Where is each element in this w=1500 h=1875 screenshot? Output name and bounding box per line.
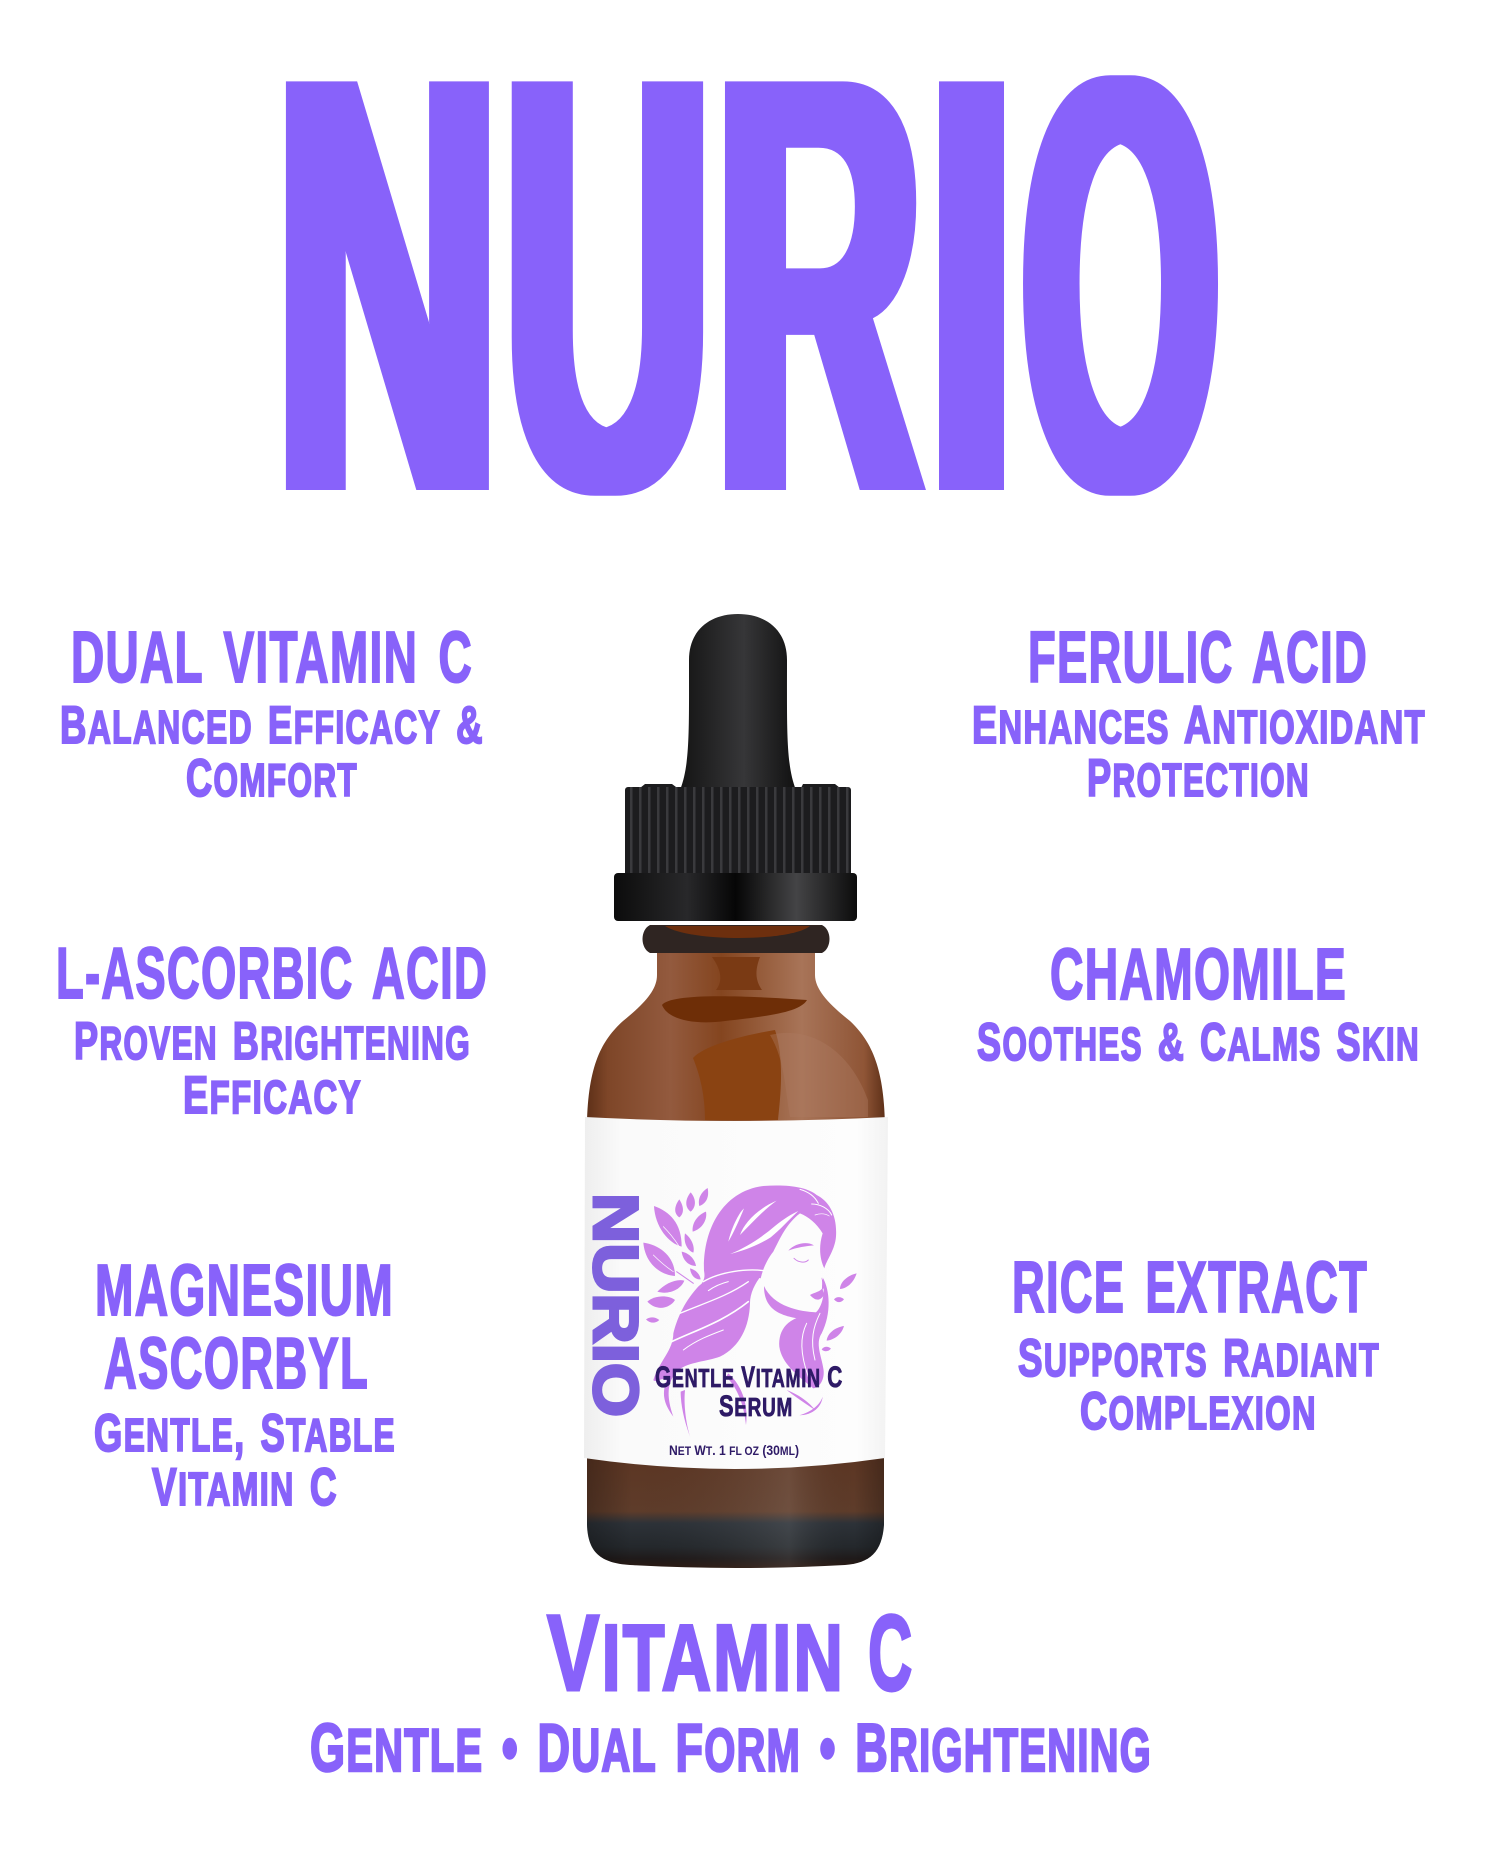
ingredient: Magnesium Ascorbyl bbox=[94, 1251, 396, 1517]
neck opening bbox=[665, 926, 810, 938]
label net weight: NET WT. 1 FL OZ (30ML) bbox=[669, 1442, 799, 1458]
dropper cap ribbed bbox=[614, 784, 857, 921]
description line 2: VITAMIN C bbox=[152, 1458, 338, 1517]
heading line 1: MAGNESIUM bbox=[95, 1251, 394, 1331]
ingredient: L-Ascorbic Acid bbox=[56, 934, 488, 1125]
description line 2: PROTECTION bbox=[1087, 749, 1310, 808]
ingredient: Ferulic Acid bbox=[972, 618, 1426, 808]
base sheen bbox=[587, 1450, 884, 1568]
heading: L-ASCORBIC ACID bbox=[56, 934, 488, 1014]
label product name line 2: SERUM bbox=[719, 1390, 793, 1423]
description: ENHANCES ANTIOXIDANT bbox=[972, 696, 1426, 755]
label brand: NURIO: NURIO bbox=[580, 1193, 650, 1417]
description line 2: COMFORT bbox=[186, 749, 358, 808]
footer: product name: C bbox=[868, 1592, 914, 1713]
description: SUPPORTS RADIANT bbox=[1018, 1329, 1380, 1388]
description line 2: EFFICACY bbox=[183, 1066, 362, 1125]
description: BALANCED EFFICACY & bbox=[60, 696, 484, 755]
footer: product name: VITAMIN bbox=[547, 1592, 845, 1713]
ingredient: Dual Vitamin C bbox=[60, 618, 484, 808]
icon: woman with leaves bbox=[643, 1185, 857, 1438]
bottle base bbox=[587, 1450, 884, 1568]
description: PROVEN BRIGHTENING bbox=[74, 1012, 471, 1071]
description: GENTLE, STABLE bbox=[94, 1404, 396, 1463]
description line 2: COMPLEXION bbox=[1080, 1382, 1317, 1441]
description: SOOTHES & CALMS SKIN bbox=[977, 1013, 1420, 1072]
neck ring bbox=[642, 925, 830, 953]
heading: CHAMOMILE bbox=[1050, 935, 1347, 1015]
glass reflections bbox=[662, 957, 868, 1120]
product: serum bottle bbox=[580, 614, 888, 1568]
label product name: GENTLE VITAMIN C bbox=[655, 1361, 843, 1394]
heading: DUAL VITAMIN C bbox=[71, 618, 473, 698]
title: NURIO bbox=[275, 0, 1219, 617]
heading line 2: ASCORBYL bbox=[104, 1324, 369, 1404]
dropper bulb bbox=[680, 614, 796, 790]
ingredient: Rice Extract bbox=[1012, 1248, 1380, 1441]
ingredient: Chamomile bbox=[977, 935, 1420, 1072]
footer: tagline: GENTLE • DUAL FORM • BRIGHTENING bbox=[310, 1710, 1152, 1786]
bottle glass bbox=[587, 948, 885, 1125]
label bbox=[584, 1117, 888, 1469]
